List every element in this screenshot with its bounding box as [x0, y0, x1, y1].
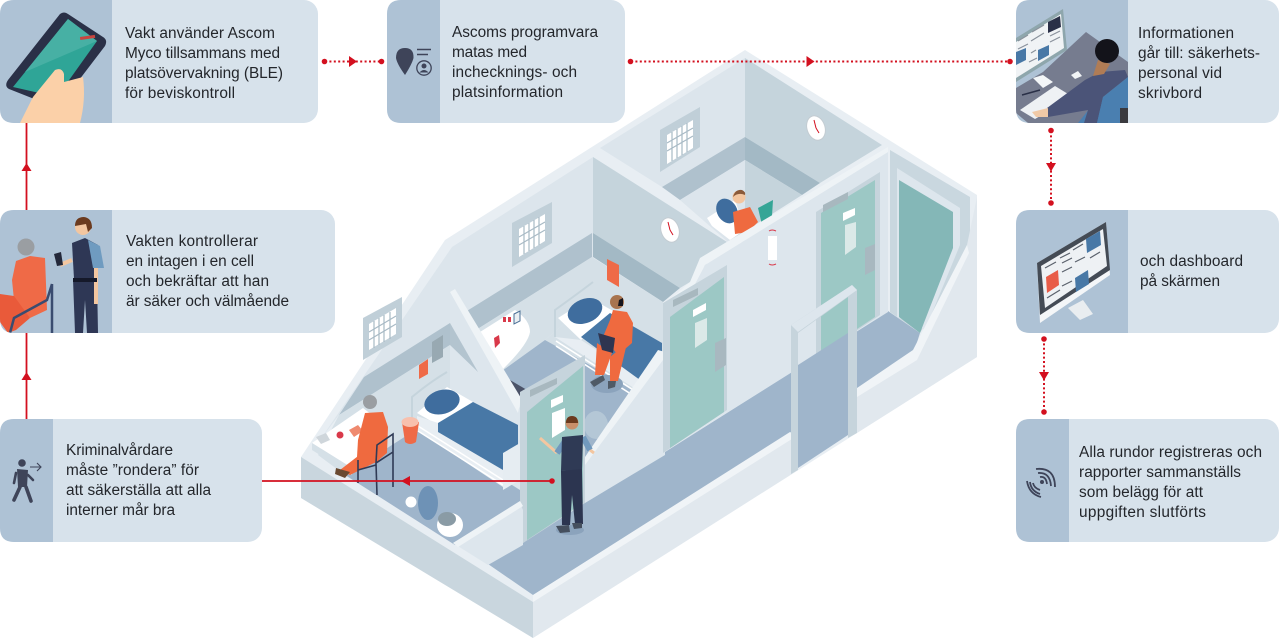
seated inmate at desk	[335, 395, 393, 495]
stripe cell one and two	[339, 233, 592, 415]
waste bin	[402, 417, 419, 444]
card text: Kriminalvårdare	[66, 442, 173, 459]
card: dashboard on screen	[1016, 210, 1279, 333]
front low wall	[533, 432, 795, 638]
card text: skrivbord	[1138, 85, 1202, 102]
corridor floor	[488, 311, 920, 595]
cell one lower wall	[318, 345, 450, 475]
right wall of cell two upper	[593, 157, 727, 288]
cut wall between cells	[420, 289, 521, 505]
card text: Informationen	[1138, 25, 1234, 42]
card text: Ascoms programvara	[452, 24, 598, 41]
door wall	[663, 152, 888, 453]
card text: personal vid	[1138, 65, 1222, 82]
low wall between door one and door two	[585, 350, 665, 503]
card text: en intagen i en cell	[126, 253, 254, 270]
door two	[663, 265, 727, 453]
card text: som belägg för att	[1079, 484, 1204, 501]
wall plaque	[432, 335, 443, 363]
card text: platsinformation	[452, 84, 563, 101]
chair cell two	[498, 375, 527, 402]
card background	[1016, 210, 1279, 333]
card: security staff at desk	[1016, 0, 1279, 123]
poster cell two	[607, 259, 619, 287]
icon: desktop monitor with dashboard	[1037, 222, 1110, 323]
card text: uppgiften slutförts	[1079, 504, 1206, 521]
desk cell one with items	[312, 408, 385, 475]
arrow: rounds to guard check	[22, 333, 32, 419]
building silhouette	[301, 50, 977, 638]
upper room window	[660, 107, 700, 172]
card text: Vakten kontrollerar	[126, 233, 258, 250]
card: rounds are registered	[1016, 419, 1279, 542]
back wall of cells	[320, 157, 593, 440]
right wall stripe	[593, 233, 680, 302]
cell two window	[512, 202, 552, 267]
card background	[0, 0, 318, 123]
card text: för beviskontroll	[125, 85, 235, 102]
clock upper room	[804, 113, 828, 143]
card text: platsövervakning (BLE)	[125, 65, 283, 82]
arrow: guard check to phone	[22, 123, 32, 210]
sink cell two	[584, 411, 608, 439]
card text: rapporter sammanställs	[1079, 464, 1241, 481]
desk cell two with items	[480, 310, 530, 372]
icon: walking person with arrow	[14, 459, 41, 501]
guard at the door	[540, 416, 594, 535]
door three	[816, 172, 880, 358]
icon: location pin and identity badge	[396, 48, 431, 75]
card text: på skärmen	[1140, 273, 1220, 290]
arrow: phone to software	[322, 56, 384, 67]
card text: är säker och välmående	[126, 293, 289, 310]
end room back wall	[890, 150, 970, 333]
card text: att säkerställa att alla	[66, 482, 211, 499]
bed cell one	[412, 372, 520, 490]
card text: Alla rundor registreras och	[1079, 444, 1262, 461]
card text: Vakt använder Ascom	[125, 25, 275, 42]
card background	[387, 0, 625, 123]
bed cell two	[555, 282, 665, 396]
end wall top band	[857, 245, 969, 397]
alarm sensor	[768, 230, 777, 265]
icon panel	[1016, 419, 1069, 542]
card text: interner mår bra	[66, 502, 175, 519]
card: guards must do rounds	[0, 419, 262, 542]
upper room back walls	[600, 58, 882, 242]
icon: wireless signal	[1027, 469, 1055, 497]
icon panel with staff at desk	[1016, 0, 1128, 123]
icon panel with phone and hand	[0, 0, 112, 123]
card background	[0, 419, 262, 542]
seated inmate with book	[590, 295, 633, 393]
card text: och dashboard	[1140, 253, 1243, 270]
card background	[1016, 0, 1279, 123]
card text: går till: säkerhets-	[1138, 45, 1260, 62]
corridor gate	[791, 285, 857, 474]
low partition cell one	[453, 501, 523, 565]
toilet	[406, 486, 463, 537]
cell one window	[363, 297, 402, 360]
poster cell one	[419, 359, 428, 379]
arrow: guard to rounds card	[262, 476, 555, 486]
icon panel	[387, 0, 440, 123]
icon panel	[1016, 210, 1128, 333]
end room door	[897, 168, 960, 333]
door one	[520, 355, 585, 545]
card text: och bekräftar att han	[126, 273, 269, 290]
inmate reading in upper cell	[707, 190, 773, 240]
clock cell two	[658, 215, 682, 245]
slab front left face	[301, 457, 533, 638]
isometric prison cell block	[301, 50, 977, 638]
cell one floor	[345, 427, 520, 545]
icon panel	[0, 419, 53, 542]
card background	[0, 210, 335, 333]
card: guard checks inmate	[0, 210, 335, 333]
card: guard uses Ascom Myco	[0, 0, 318, 123]
arrow: staff to dashboard	[1046, 128, 1056, 206]
card text: inchecknings- och	[452, 64, 577, 81]
cell two lower walls and floor	[476, 257, 663, 463]
arrow: dashboard to registered rounds	[1039, 336, 1049, 415]
card text: Myco tillsammans med	[125, 45, 280, 62]
card: software is fed	[387, 0, 625, 123]
arrow: software to staff	[628, 56, 1013, 67]
card text: matas med	[452, 44, 527, 61]
card background	[1016, 419, 1279, 542]
card text: måste ”rondera” för	[66, 462, 199, 479]
door wall top band	[665, 147, 888, 304]
end wall face	[857, 197, 977, 433]
icon panel with inmate and guard	[0, 210, 112, 333]
